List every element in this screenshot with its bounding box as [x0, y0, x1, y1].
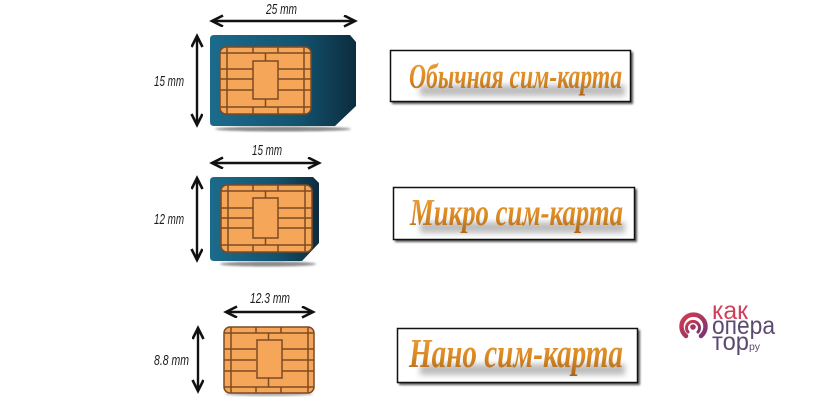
panel: micro SIM card: [154, 142, 319, 266]
arrow: nano height: [197, 328, 199, 391]
label: 12.3 mm: 12.3 mm: [250, 290, 290, 307]
label: 25 mm: 25 mm: [265, 1, 297, 18]
logo: kak operator: [682, 297, 775, 356]
label: 15 mm height: 15 mm: [154, 73, 184, 90]
icon: micro SIM body: [210, 177, 319, 266]
arrow: nano width: [226, 311, 313, 313]
arrow: standard width: [212, 20, 355, 22]
heading: standard SIM: Обычная сим-карта: [409, 57, 622, 96]
label: 15 mm width: 15 mm: [252, 142, 282, 159]
panel: label nano: [398, 328, 640, 385]
heading: nano SIM: Нано сим-карта: [408, 330, 623, 376]
panel: nano SIM card: [154, 290, 314, 396]
panel: standard SIM card: [154, 1, 356, 132]
arrow: micro height: [196, 178, 198, 260]
arrow: micro width: [212, 162, 319, 164]
logo wordmark: ру: [749, 342, 760, 353]
logo wordmark: тор: [712, 328, 749, 356]
arrow: standard height: [196, 36, 198, 125]
label: 8.8 mm: 8.8 mm: [154, 352, 189, 369]
label: 12 mm: 12 mm: [154, 211, 184, 228]
heading: micro SIM: Микро сим-карта: [409, 192, 623, 234]
logo wordmark: [712, 297, 775, 356]
icon: standard SIM body: [210, 35, 356, 132]
panel: label micro: [394, 188, 637, 242]
icon: signal waves: [682, 315, 706, 336]
icon: standard SIM chip: [220, 47, 311, 114]
icon: nano SIM chip: [224, 327, 314, 396]
panel: label standard: [390, 50, 633, 104]
logo wordmark: опера: [712, 312, 775, 340]
icon: micro SIM chip: [221, 185, 312, 252]
logo wordmark: как: [712, 297, 749, 325]
